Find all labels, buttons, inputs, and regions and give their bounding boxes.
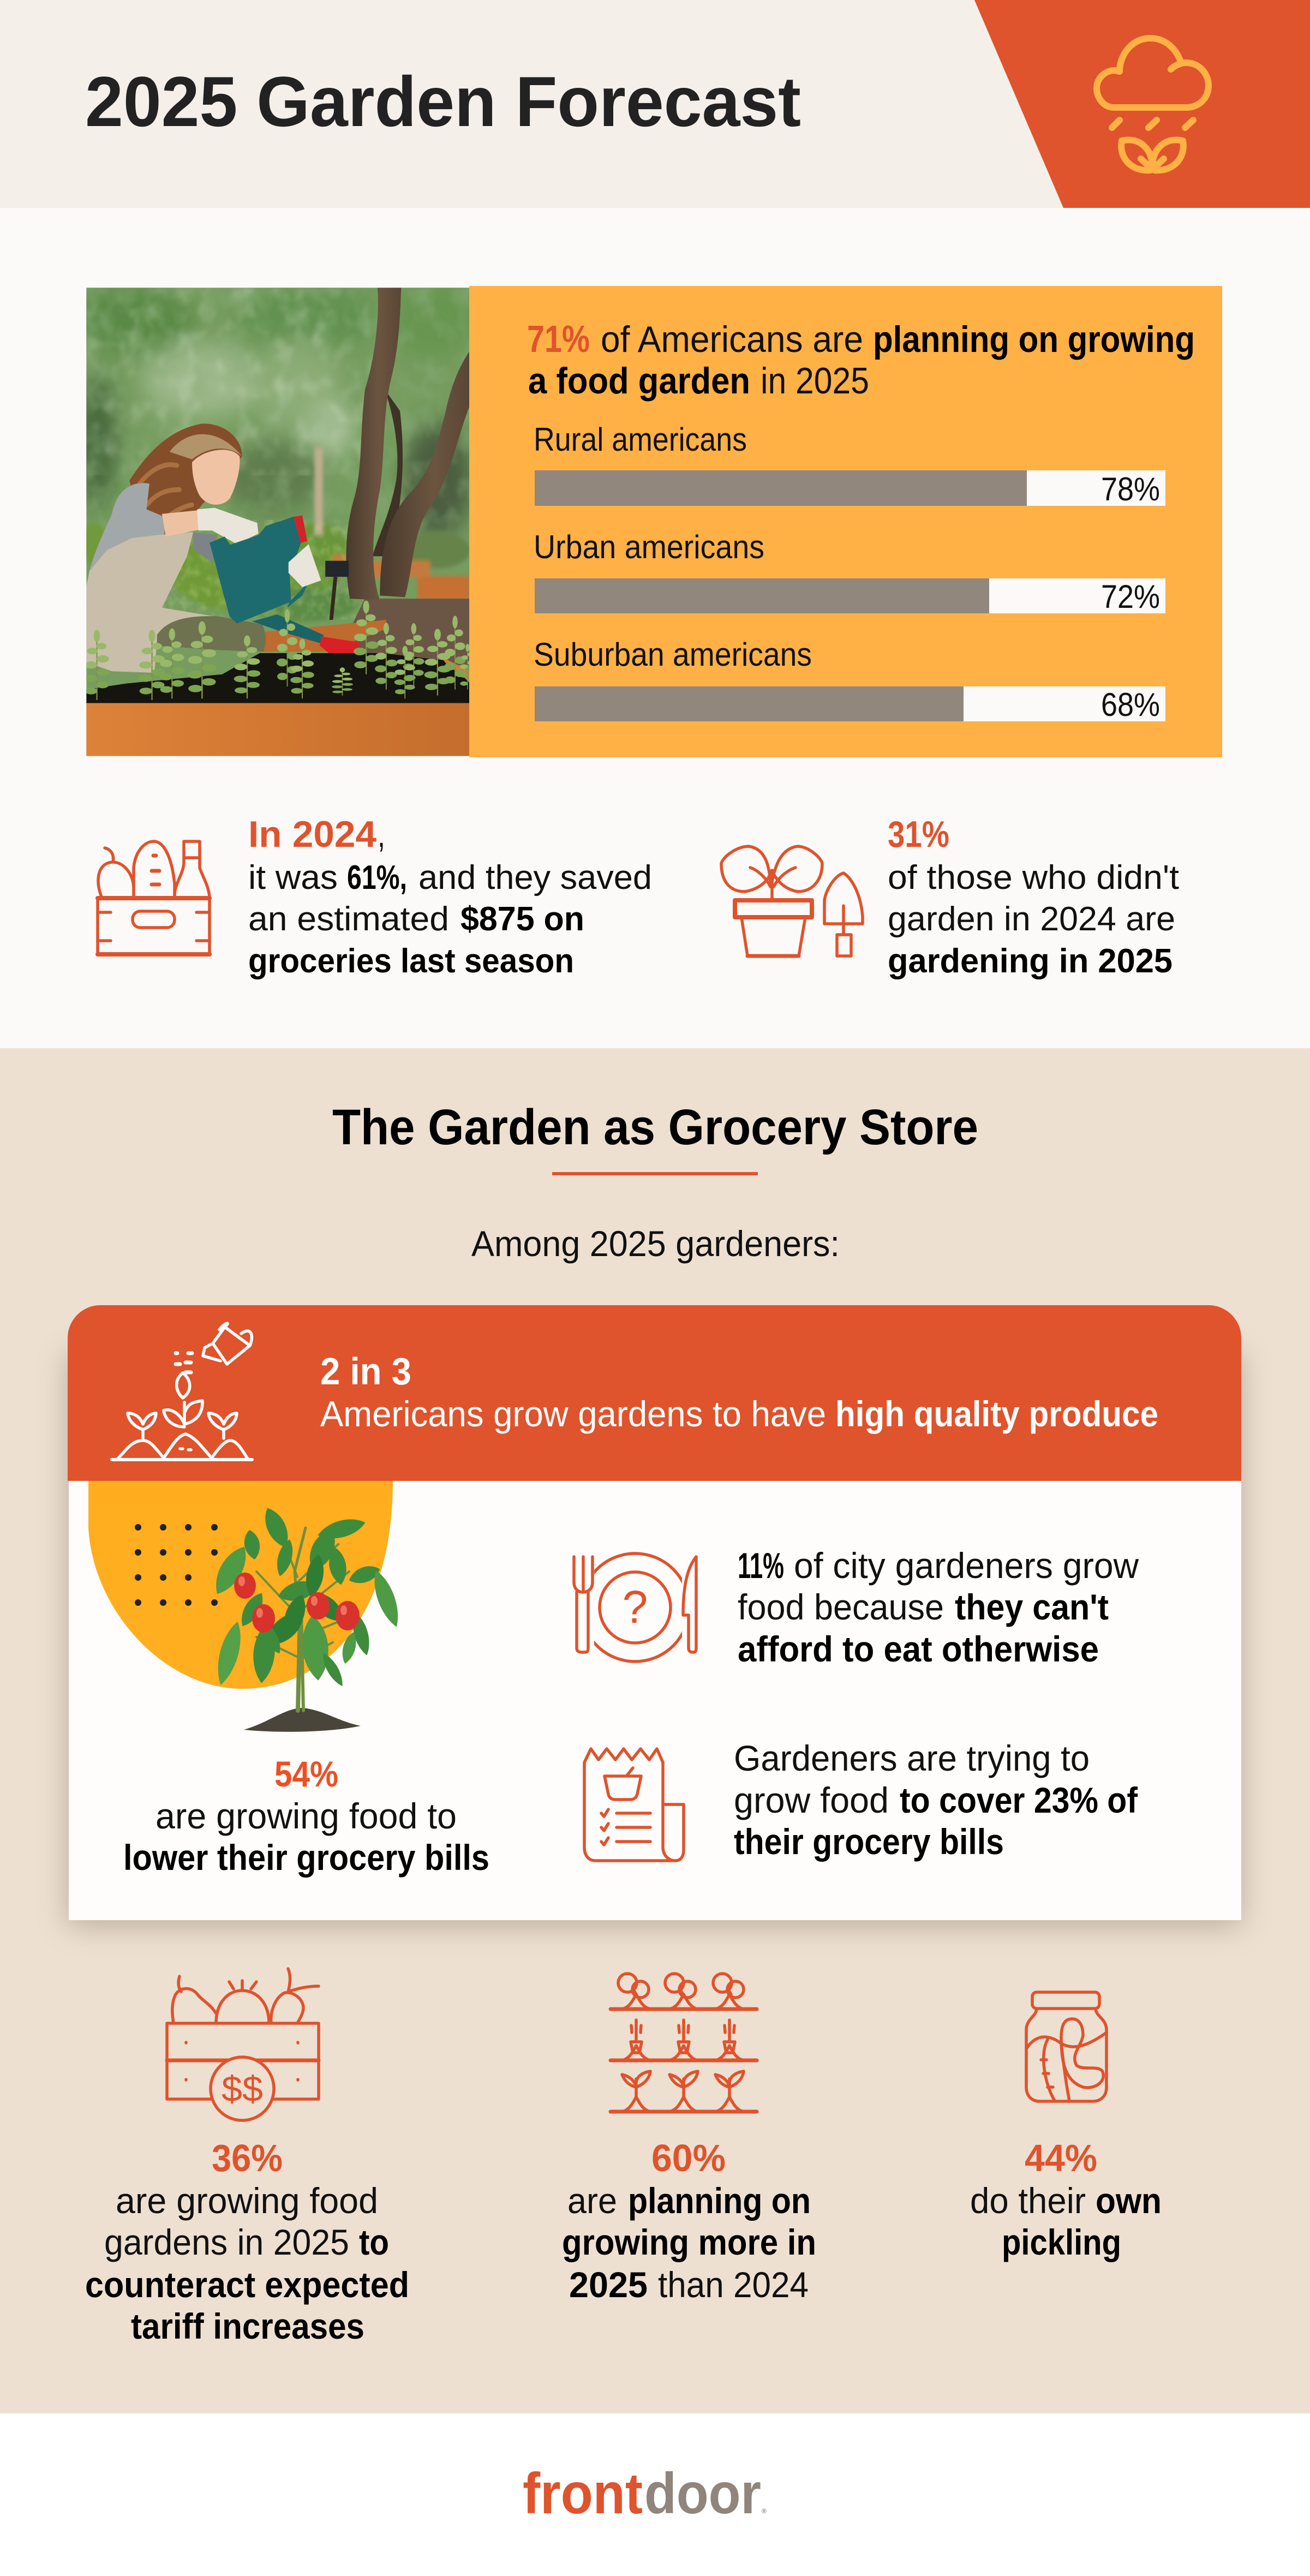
subheading: Among 2025 gardeners:: [471, 1223, 840, 1264]
text: 11% of city gardeners: of city gardeners grow: [794, 1545, 1139, 1586]
heading: 71% planning: of Americans are: [601, 319, 863, 360]
icon: grocery crate: [98, 841, 210, 954]
text: In 2024: an estimated: [248, 900, 449, 938]
text: In 2024: it was: [248, 859, 338, 896]
pots and planter: [86, 653, 470, 703]
text: In 2024: and they saved: [418, 859, 652, 896]
text: In 2024: $875 on: [460, 900, 584, 938]
icon: plate with question mark: [570, 1550, 698, 1667]
text: 11% of city gardeners: food because: [738, 1587, 944, 1627]
header band: [0, 0, 1310, 208]
icon: potted plant and trowel: [721, 846, 863, 956]
heading: 71% planning: [527, 318, 1195, 402]
text: 44%: [970, 2137, 1162, 2262]
text: In 2024: groceries last season: [248, 942, 574, 980]
panel: 71% of Americans: [469, 286, 1222, 757]
text: 11% of city gardeners: 11%: [738, 1545, 784, 1586]
heading: 71% planning: 71%: [527, 318, 590, 360]
bar: suburban: 68%: [1101, 686, 1160, 723]
text: 31%: 31%: [888, 814, 949, 855]
text: 31%: [888, 814, 1179, 980]
text: 54%: [123, 1754, 489, 1878]
header text: high quality produce: [835, 1394, 1158, 1434]
text: 31%: garden in 2024 are: [888, 900, 1175, 938]
text: 60%: 2025: [569, 2264, 648, 2305]
text: 11% of city gardeners: [738, 1545, 1139, 1669]
logo: frontdoor: [523, 2461, 767, 2526]
icon: plate with question mark: ?: [623, 1581, 648, 1633]
section background: grocery store: [0, 1048, 1310, 2413]
dot grid: [135, 1524, 218, 1606]
bar: suburban: [534, 636, 1165, 723]
text: 60%: 60%: [651, 2137, 726, 2179]
icon: cloud with rain and sprout: [1097, 38, 1209, 170]
section heading: [332, 1099, 978, 1175]
text: 36%: are growing food: [116, 2180, 378, 2221]
bar: rural: Rural americans: [534, 421, 747, 458]
title: 2025 Garden Forecast: [85, 62, 801, 141]
raised beds behind: [262, 620, 386, 652]
sign: [325, 561, 349, 577]
text: 60%: growing more in: [562, 2222, 816, 2262]
text: 36%: counteract expected: [85, 2264, 409, 2305]
text: 44%: 44%: [1025, 2137, 1097, 2179]
text: trying to cover 23%: their grocery bills: [734, 1821, 1004, 1862]
text: 60%: than 2024: [658, 2264, 809, 2305]
logo: frontdoor: door: [644, 2461, 761, 2526]
text: trying to cover 23%: [734, 1738, 1138, 1862]
section heading: The Garden as Grocery Store: [332, 1099, 978, 1155]
text: 36%: [85, 2137, 409, 2346]
heading: 71% planning: in 2025: [761, 360, 869, 402]
header text: 2 in 3: [320, 1350, 411, 1392]
text: 36%: to: [359, 2222, 389, 2262]
text: 11% of city gardeners: they can't: [955, 1587, 1109, 1627]
text: 44%: do their: [970, 2180, 1086, 2221]
text: trying to cover 23%: grow food: [734, 1780, 889, 1820]
icon: rows of crops: [611, 1974, 757, 2112]
text: 11% of city gardeners: afford to eat otherwise: [738, 1629, 1099, 1669]
text: 60%: planning on: [628, 2180, 811, 2221]
text: 36%: 36%: [212, 2137, 283, 2179]
header text: [320, 1350, 1158, 1434]
bar: urban: 72%: [1101, 578, 1160, 615]
text: In 2024: In 2024: [248, 814, 376, 855]
text: 54%: 54%: [274, 1754, 338, 1794]
watering can: [210, 516, 301, 624]
yellow blob: [88, 1481, 393, 1689]
text: In 2024: ,: [378, 814, 385, 855]
woman: [129, 423, 242, 535]
logo: frontdoor: ®: [762, 2507, 767, 2515]
heading: 71% planning: planning on growing: [873, 319, 1195, 360]
icon: watering seedlings: [112, 1323, 252, 1460]
icon: grocery receipt: [584, 1749, 684, 1861]
text: 54%: are growing food to: [155, 1796, 457, 1836]
bar: urban: Urban americans: [534, 529, 764, 565]
photo: gardener watering seedlings: [67, 280, 476, 756]
text: 44%: pickling: [1002, 2222, 1121, 2262]
text: In 2024: 61%,: [347, 859, 407, 896]
bar: rural: 78%: [1101, 471, 1160, 507]
card shadow: [68, 1353, 1241, 1926]
text: 54%: lower their grocery bills: [123, 1837, 489, 1878]
text: 44%: own: [1096, 2180, 1162, 2221]
icon: vegetable crate with dollars: $$: [222, 2069, 263, 2109]
text: 36%: tariff increases: [131, 2306, 364, 2346]
text: 60%: are: [567, 2180, 617, 2221]
panel: card: [68, 1305, 1241, 1920]
tree trunks: [373, 390, 403, 556]
heading: 71% planning: a food garden: [528, 360, 750, 402]
tomato plant: [208, 1504, 404, 1732]
bar: rural: [534, 421, 1165, 507]
lower foliage: [82, 447, 470, 621]
text: 60%: [562, 2137, 816, 2305]
bar: urban: [534, 529, 1165, 615]
logo: frontdoor: front: [523, 2461, 643, 2526]
bar: suburban: Suburban americans: [534, 636, 812, 673]
text: 31%: of those who didn't: [888, 859, 1179, 896]
icon: pickle jar: [1026, 1992, 1106, 2101]
card header: [68, 1305, 1241, 1481]
footer band: [0, 2413, 1310, 2576]
text: In 2024: [248, 814, 652, 980]
text: trying to cover 23%: to cover 23% of: [900, 1780, 1138, 1820]
text: trying to cover 23%: Gardeners are trying to: [734, 1738, 1090, 1778]
seedlings: [84, 601, 476, 700]
text: 36%: gardens in 2025: [104, 2222, 349, 2262]
icon: vegetable crate with dollars: [167, 1969, 319, 2120]
header text: Americans grow gardens to have: [320, 1394, 826, 1434]
text: 31%: gardening in 2025: [888, 942, 1173, 980]
